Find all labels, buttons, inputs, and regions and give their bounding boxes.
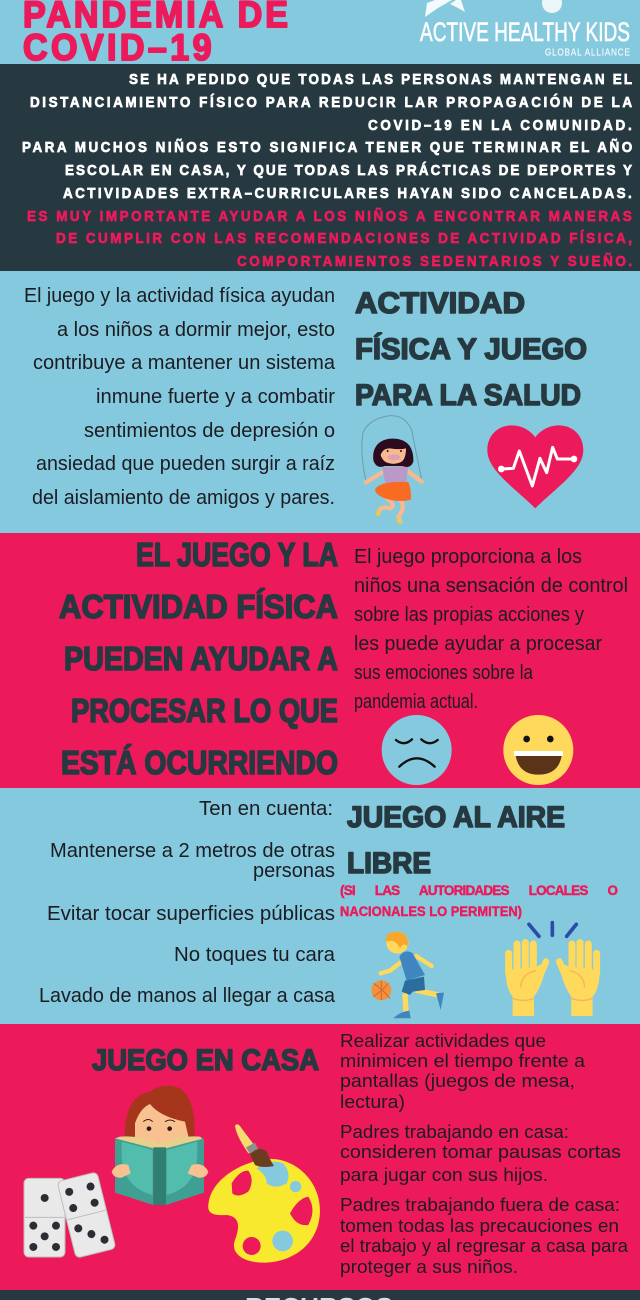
panel: outdoor play	[0, 788, 640, 1024]
text block: home recommendations: tomen todas las precauciones en	[340, 1216, 619, 1236]
panel: play at home	[0, 1024, 640, 1290]
text block: home recommendations: Realizar actividades que	[340, 1031, 546, 1051]
text block: sense of control: El juego proporciona a los	[354, 546, 582, 568]
panel: resources footer	[0, 1290, 640, 1300]
heading: outdoor play: LIBRE	[347, 847, 431, 880]
text block: home recommendations: consideren tomar pausas cortas	[340, 1142, 621, 1162]
text block: sleep and immunity: a los niños a dormir mejor, esto	[57, 319, 335, 341]
heading: physical activity and play	[355, 287, 587, 412]
panel: play helps process	[0, 533, 640, 788]
text block: home recommendations: Padres trabajando en casa:	[340, 1122, 569, 1142]
icon: sad face	[382, 715, 452, 785]
heading: outdoor play	[347, 801, 565, 880]
text block: home recommendations: Padres trabajando fuera de casa:	[340, 1195, 620, 1215]
text block: recommendations: COMPORTAMIENTOS SEDENTARIOS Y SUEÑO.	[237, 251, 632, 270]
text block: sleep and immunity: ansiedad que pueden surgir a raíz	[36, 453, 335, 475]
text block: precautions: Mantenerse a 2 metros de otras	[50, 840, 335, 862]
heading: outdoor play: JUEGO AL AIRE	[347, 801, 565, 834]
text block: sleep and immunity: El juego y la actividad física ayudan	[24, 285, 335, 307]
icon: dominoes	[24, 1172, 116, 1258]
text block: sense of control: niños una sensación de control	[354, 575, 628, 597]
text block: home recommendations: para jugar con sus hijos.	[340, 1165, 548, 1185]
icon: paint palette and brush	[208, 1124, 320, 1263]
heading: play helps process events: PROCESAR LO QUE	[71, 692, 338, 729]
text block: recommendations: ES MUY IMPORTANTE AYUDAR A LOS NIÑOS A ENCONTRAR MANERAS	[27, 206, 632, 225]
note: if authorities permit: NACIONALES LO PERMITEN)	[340, 904, 522, 919]
text block: physical distancing	[22, 71, 632, 202]
heading: play helps process events: ACTIVIDAD FÍSICA	[59, 588, 338, 625]
text block: physical distancing: PARA MUCHOS NIÑOS ESTO SIGNIFICA TENER QUE TERMINAR EL AÑO	[22, 137, 632, 156]
text block: precautions: Ten en cuenta:	[199, 798, 333, 820]
text block: precautions: Evitar tocar superficies públicas	[47, 903, 335, 925]
text block: sleep and immunity: del aislamiento de amigos y pares.	[32, 487, 335, 509]
logo: Active Healthy Kids	[420, 0, 630, 58]
icon: child reading book	[112, 1086, 208, 1205]
note: if authorities permit	[340, 883, 618, 919]
text block: home recommendations	[340, 1031, 629, 1277]
text block: sense of control: pandemia actual.	[354, 691, 478, 713]
icon: girl jumping rope	[362, 416, 422, 523]
text block: precautions	[39, 798, 336, 1007]
text block: sleep and immunity: contribuye a mantener un sistema	[33, 352, 336, 374]
panel: header	[0, 0, 640, 68]
icon: raised hands	[506, 923, 600, 1016]
heading: physical activity and play: PARA LA SALUD	[355, 379, 581, 412]
panel: physical activity and health	[0, 271, 640, 533]
text block: precautions: No toques tu cara	[174, 944, 336, 966]
text block: home recommendations: el trabajo y al regresar a casa para	[340, 1236, 629, 1256]
title: COVID–19	[23, 27, 212, 68]
panel: introduction	[0, 64, 640, 271]
title	[23, 0, 288, 68]
heading: physical activity and play: FÍSICA Y JUEGO	[355, 332, 587, 366]
text block: precautions: Lavado de manos al llegar a casa	[39, 985, 336, 1007]
text block: physical distancing: COVID–19 EN LA COMUNIDAD.	[368, 117, 632, 134]
heading: play helps process events: PUEDEN AYUDAR A	[64, 640, 338, 677]
text block: physical distancing: DISTANCIAMIENTO FÍSICO PARA REDUCIR LAR PROPAGACIÓN DE LA	[30, 92, 632, 111]
text block: recommendations	[27, 206, 632, 270]
text block: sleep and immunity: inmune fuerte y a combatir	[96, 386, 335, 408]
text block: home recommendations: lectura)	[340, 1092, 405, 1112]
icon: heart with pulse	[487, 425, 583, 508]
text block: home recommendations: minimicen el tiempo frente a	[340, 1051, 586, 1071]
text block: physical distancing: SE HA PEDIDO QUE TODAS LAS PERSONAS MANTENGAN EL	[129, 71, 632, 88]
text block: sleep and immunity: sentimientos de depresión o	[84, 420, 335, 442]
text block: home recommendations: pantallas (juegos de mesa,	[340, 1071, 575, 1091]
text block: sleep and immunity	[24, 285, 336, 509]
heading: play helps process events: EL JUEGO Y LA	[136, 536, 338, 573]
text block: sense of control: sus emociones sobre la	[354, 662, 534, 684]
heading: play helps process events: ESTÁ OCURRIENDO	[61, 744, 338, 781]
icon: laughing face	[503, 715, 573, 785]
icon: boy with basketball	[371, 932, 444, 1018]
text block: sense of control	[354, 546, 628, 713]
text block: physical distancing: ESCOLAR EN CASA, Y QUE TODAS LAS PRÁCTICAS DE DEPORTES Y	[65, 161, 632, 179]
text block: sense of control: les puede ayudar a procesar	[354, 633, 602, 655]
text block: precautions: personas	[253, 860, 335, 882]
text block: physical distancing: ACTIVIDADES EXTRA–CURRICULARES HAYAN SIDO CANCELADAS.	[63, 185, 632, 202]
heading: play at home: JUEGO EN CASA	[92, 1044, 319, 1077]
text block: sense of control: sobre las propias acciones y	[354, 604, 584, 626]
heading: play helps process events	[59, 536, 338, 781]
note: if authorities permit: (SI LAS AUTORIDADES LOCALES O	[340, 883, 618, 898]
text block: home recommendations: proteger a sus niños.	[340, 1257, 518, 1277]
logo: Active Healthy Kids: GLOBAL ALLIANCE	[545, 47, 630, 58]
heading: physical activity and play: ACTIVIDAD	[355, 287, 525, 320]
text block: recommendations: DE CUMPLIR CON LAS RECOMENDACIONES DE ACTIVIDAD FÍSICA,	[56, 229, 632, 247]
